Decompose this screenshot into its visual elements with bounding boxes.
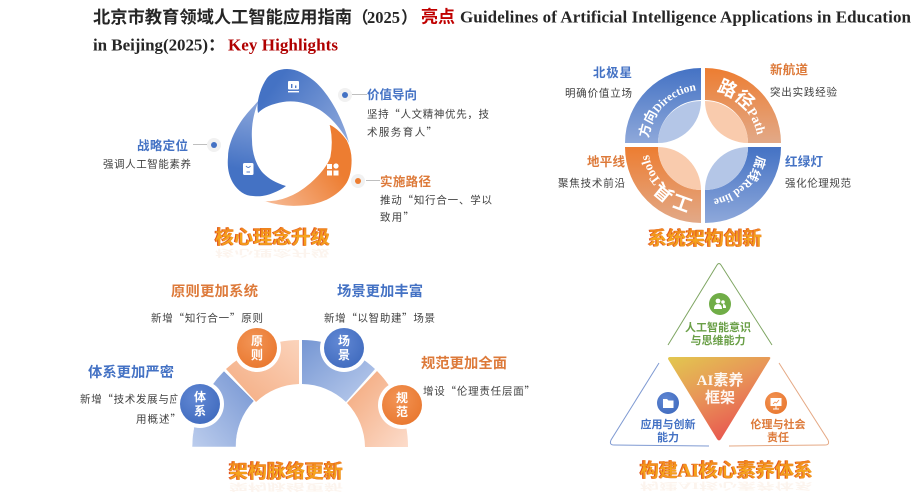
semicircle arch — [192, 340, 408, 447]
badge: system — [176, 380, 224, 428]
text: principle: 新增“知行合一”原则 — [151, 310, 263, 326]
icon: people — [714, 299, 726, 309]
quadrant: path — [705, 68, 781, 143]
callout: implementation path: 推动“知行合一、学以 — [380, 192, 492, 208]
top triangle: awareness: 与思维能力 — [690, 333, 746, 347]
quadrant: path: 路径Path — [716, 78, 765, 135]
text: system — [80, 363, 181, 426]
badge: scenario: 场 — [338, 334, 350, 348]
right triangle: ethics: 伦理与社会 — [750, 417, 806, 431]
title — [93, 6, 912, 54]
central triangle: AI素养 — [697, 371, 743, 389]
panel: system architecture — [558, 62, 852, 250]
quadrant: tools: 工具Tools — [642, 155, 692, 213]
title: （ — [352, 8, 368, 26]
icon: presentation board — [770, 398, 782, 409]
label: new channel: 新航道 — [770, 62, 808, 77]
heading: AI literacy: 构建AI核心素养体系 — [640, 480, 813, 491]
text: system: 新增“技术发展与应 — [80, 392, 180, 406]
cycle diagram — [228, 69, 352, 206]
label: north star — [565, 65, 632, 100]
callout: strategic positioning: 强调人工智能素养 — [103, 156, 192, 172]
heading: core concept: 核心理念升级 — [215, 247, 330, 258]
label: traffic light: 红绿灯 — [785, 154, 823, 169]
text: principle: 原则更加系统 — [171, 282, 258, 300]
heading: core concept: 核心理念升级 — [215, 226, 330, 248]
icon: app blocks — [327, 163, 339, 176]
quadrant: red line: 底线Red line — [714, 156, 766, 204]
quadrant: red line — [705, 147, 781, 223]
text: norms: 规范更加全面 — [421, 354, 507, 372]
label: north star: 北极星 — [593, 65, 632, 80]
badge: norms — [378, 381, 426, 429]
icon: book chart — [288, 81, 299, 92]
callout: value orientation: 术服务育人” — [367, 124, 437, 140]
text: principle — [151, 282, 263, 326]
panel: framework update — [80, 282, 535, 492]
badge: system: 体 — [194, 389, 206, 404]
callout: implementation path: 实施路径 — [380, 174, 431, 189]
callout: value orientation: 价值导向 — [367, 87, 417, 102]
text: system: 用概述” — [136, 412, 181, 426]
top triangle: awareness — [668, 264, 772, 347]
title: 北京市教育领域人工智能应用指南 — [93, 7, 352, 27]
badge: scenario: 景 — [338, 348, 350, 362]
left triangle: application: 应用与创新 — [640, 417, 696, 431]
badge: norms: 规 — [396, 391, 408, 405]
quadrant ring — [625, 68, 781, 223]
heading: core concept — [215, 226, 330, 258]
title: ） — [401, 8, 418, 26]
heading: system architecture: 系统架构创新 — [648, 226, 762, 250]
title: 亮点 — [421, 6, 455, 26]
text: scenario — [324, 282, 435, 326]
heading: framework: 架构脉络更新 — [229, 460, 343, 482]
text: scenario: 场景更加丰富 — [337, 282, 423, 300]
icon: tablet — [243, 163, 254, 175]
text: system: 体系更加严密 — [88, 363, 174, 381]
badge: principle: 原 — [251, 334, 263, 348]
callout: strategic positioning — [103, 138, 221, 172]
title: in Beijing(2025)： — [93, 36, 225, 54]
label: traffic light — [785, 154, 852, 190]
callout: value orientation: 坚持“人文精神优先，技 — [367, 106, 490, 122]
label: traffic light: 强化伦理规范 — [785, 176, 852, 190]
central triangle — [668, 357, 770, 440]
title: 2025 — [367, 8, 400, 26]
badge: system: 系 — [194, 403, 206, 418]
text: norms: 增设“伦理责任层面” — [423, 384, 535, 398]
heading: AI literacy — [640, 458, 813, 491]
top triangle: awareness: 人工智能意识 — [685, 320, 751, 334]
text: norms — [421, 354, 535, 398]
right triangle: ethics: 责任 — [767, 430, 789, 444]
icon: folder — [663, 399, 674, 408]
left triangle: application — [610, 363, 709, 446]
badge: principle — [233, 324, 281, 372]
title: Guidelines of Artificial Intelligence Applications in Education — [460, 8, 912, 26]
panel: core concept upgrade — [103, 69, 492, 258]
badge: scenario — [320, 324, 368, 372]
left triangle: application: 能力 — [657, 430, 679, 444]
callout: implementation path — [351, 174, 492, 224]
callout: value orientation — [338, 87, 490, 140]
quadrant: tools — [625, 147, 701, 223]
badge: norms: 范 — [396, 404, 408, 419]
label: horizon: 聚焦技术前沿 — [558, 176, 625, 190]
central triangle: 框架 — [705, 388, 735, 406]
quadrant: direction — [625, 68, 701, 143]
callout: strategic positioning: 战略定位 — [137, 138, 188, 153]
title: Key Highlights — [228, 36, 338, 54]
right triangle: ethics — [729, 363, 829, 446]
heading: AI literacy: 构建AI核心素养体系 — [640, 458, 813, 482]
badge: principle: 则 — [251, 348, 263, 362]
heading: framework — [229, 460, 343, 492]
label: horizon — [558, 154, 625, 190]
text: scenario: 新增“以智助建”场景 — [324, 310, 435, 326]
label: new channel: 突出实践经验 — [770, 84, 838, 100]
label: north star: 明确价值立场 — [565, 86, 632, 100]
quadrant: direction: 方向Direction — [638, 85, 696, 138]
label: horizon: 地平线 — [587, 154, 625, 169]
panel: AI literacy — [610, 264, 829, 491]
callout: implementation path: 致用” — [380, 210, 414, 224]
heading: framework: 架构脉络更新 — [229, 481, 343, 492]
label: new channel — [770, 62, 838, 100]
